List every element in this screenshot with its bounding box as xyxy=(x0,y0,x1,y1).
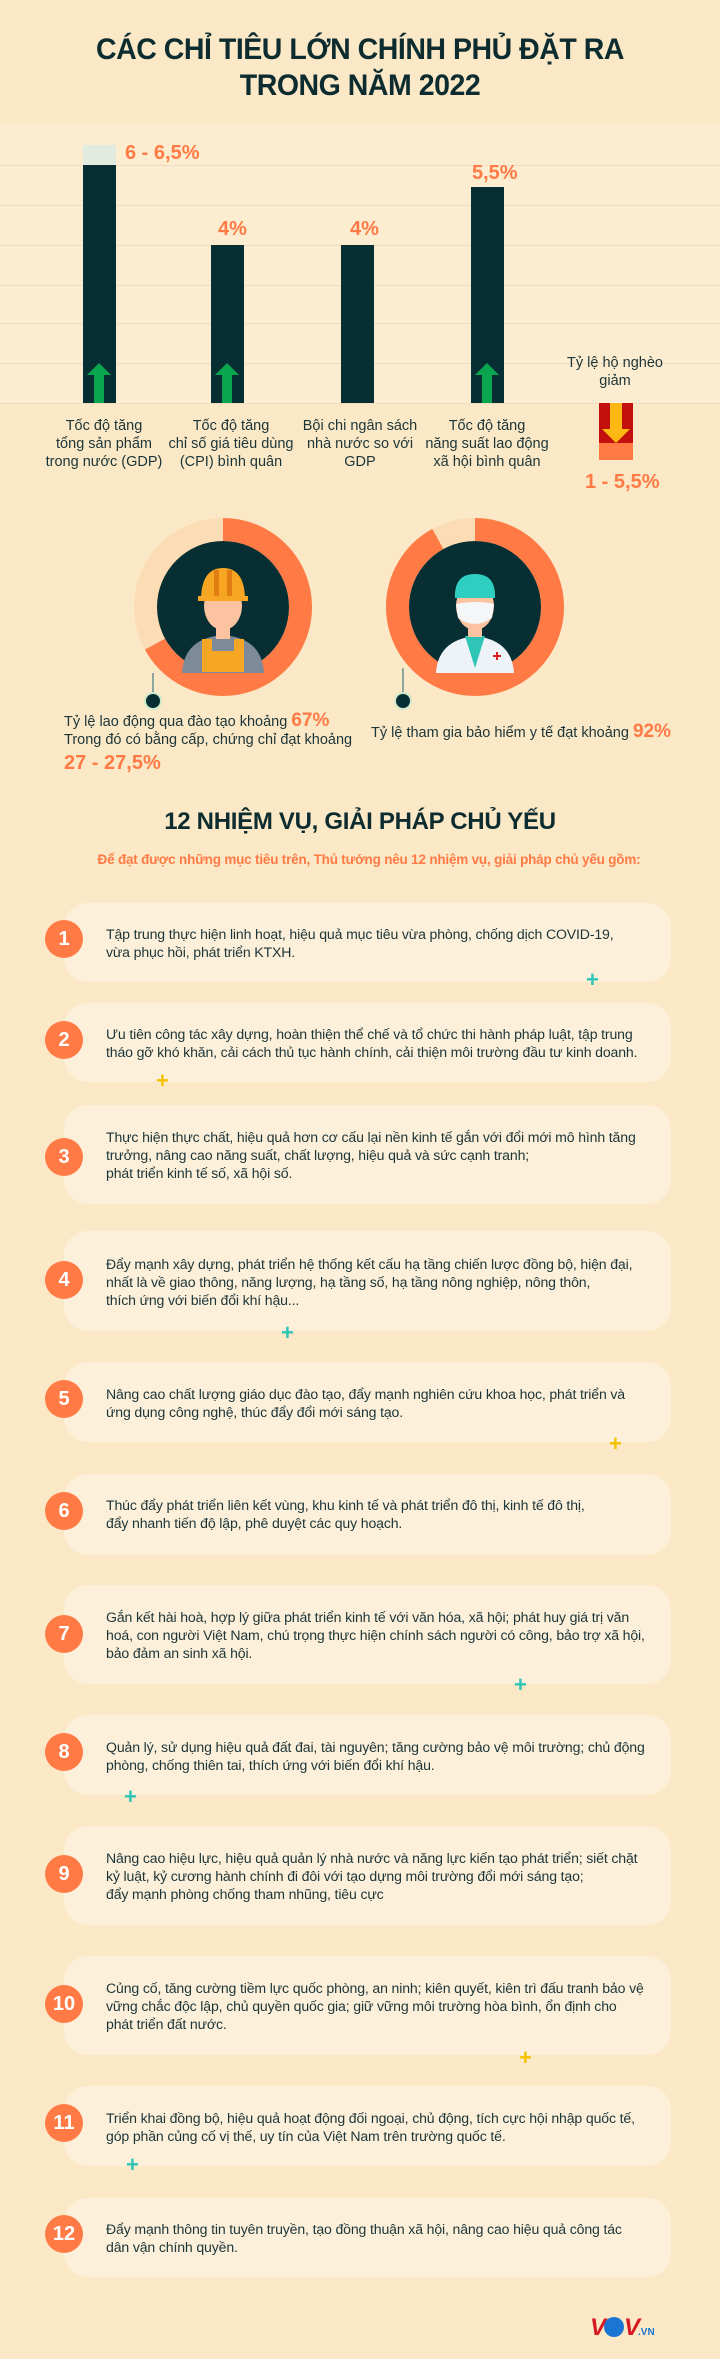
poverty indicator: 1 - 5,5% xyxy=(585,471,659,493)
task 7: hoá, con người Việt Nam, chú trọng thực hiện chính sách người có công, bảo trợ xã hội, xyxy=(106,1627,645,1643)
task 9: đẩy mạnh phòng chống tham nhũng, tiêu cực xyxy=(106,1886,384,1902)
task 2: tháo gỡ khó khăn, cải cách thủ tục hành chính, cải thiện môi trường đầu tư kinh doanh. xyxy=(106,1044,637,1060)
task 4: thích ứng với biến đổi khí hậu... xyxy=(106,1292,299,1308)
task 12: Đẩy mạnh thông tin tuyên truyền, tạo đồng thuận xã hội, nâng cao hiệu quả công tác xyxy=(106,2221,622,2237)
task 11: 11 xyxy=(53,2112,75,2134)
task 11: + xyxy=(126,2152,139,2177)
task 6: đẩy nhanh tiến độ lập, phê duyệt các quy hoạch. xyxy=(106,1515,402,1531)
task 5: ứng dụng công nghệ, thúc đẩy đổi mới sáng tạo. xyxy=(106,1404,403,1420)
bar labels: trong nước (GDP) xyxy=(46,454,162,470)
subtitle: Để đạt được những mục tiêu trên, Thủ tướng nêu 12 nhiệm vụ, giải pháp chủ yếu gồm: xyxy=(98,852,640,867)
task 3: trưởng, nâng cao năng suất, chất lượng, hiệu quả và sức cạnh tranh; xyxy=(106,1147,529,1163)
icon: worker xyxy=(182,568,264,673)
bar labels: nhà nước so với xyxy=(307,436,413,452)
poverty indicator: Tỷ lệ hộ nghèo xyxy=(567,355,663,371)
icon: down arrow box xyxy=(599,403,633,460)
task 2: + xyxy=(156,1068,169,1093)
task 10: 10 xyxy=(53,1993,75,2015)
task 1: Tập trung thực hiện linh hoạt, hiệu quả mục tiêu vừa phòng, chống dịch COVID-19, xyxy=(106,926,614,942)
bar: GDP xyxy=(83,145,116,403)
task 9: kỷ luật, kỷ cương hành chính đi đôi với tạo dựng môi trường đổi mới sáng tạo; xyxy=(106,1868,584,1884)
task 8: 8 xyxy=(58,1741,70,1763)
task 2 xyxy=(45,1003,671,1093)
task 3: 3 xyxy=(58,1146,70,1168)
task 4: nhất là về giao thông, năng lượng, hạ tầng số, hạ tầng nông nghiệp, nông thôn, xyxy=(106,1274,590,1290)
task 7: + xyxy=(514,1672,527,1697)
bar labels: Bội chi ngân sách xyxy=(303,418,417,434)
bar labels: GDP xyxy=(344,454,376,470)
task 10 xyxy=(45,1956,671,2070)
task 1: 1 xyxy=(58,928,70,950)
task 5: 5 xyxy=(58,1388,70,1410)
text: trained labor xyxy=(64,710,352,774)
task 8: phòng, chống thiên tai, thích ứng với biến đổi khí hậu. xyxy=(106,1757,435,1773)
task 1: + xyxy=(586,967,599,992)
bar labels: Tốc độ tăng xyxy=(66,418,142,434)
task 11: Triển khai đồng bộ, hiệu quả hoạt động đối ngoại, chủ động, tích cực hội nhập quốc tế, xyxy=(106,2110,635,2126)
task 11 xyxy=(45,2086,671,2177)
task 4: 4 xyxy=(58,1269,70,1291)
task 8: + xyxy=(124,1784,137,1809)
bar labels: (CPI) bình quân xyxy=(180,454,282,470)
icon: doctor xyxy=(436,574,514,673)
bar chart xyxy=(83,142,518,403)
bar labels xyxy=(46,418,549,470)
bar: labor productivity xyxy=(471,187,504,403)
task 4: + xyxy=(281,1320,294,1345)
task 5 xyxy=(45,1362,671,1456)
task 3: Thực hiện thực chất, hiệu quả hơn cơ cấu lại nền kinh tế gắn với đổi mới mô hình tăng xyxy=(106,1129,636,1145)
task 10: phát triển đất nước. xyxy=(106,2016,227,2032)
task 7: bảo đảm an sinh xã hội. xyxy=(106,1645,252,1661)
text: trained labor: Tỷ lệ lao động qua đào tạo khoảng 67% xyxy=(64,710,329,731)
title: TRONG NĂM 2022 xyxy=(240,69,480,102)
task 12: dân vận chính quyền. xyxy=(106,2239,238,2255)
task 1 xyxy=(45,903,671,992)
text: trained labor: 27 - 27,5% xyxy=(64,752,161,774)
task 10: + xyxy=(519,2045,532,2070)
task 6: 6 xyxy=(58,1500,70,1522)
task 7: Gắn kết hài hoà, hợp lý giữa phát triển kinh tế với văn hóa, xã hội; phát huy giá trị văn xyxy=(106,1609,629,1625)
task 6 xyxy=(45,1474,671,1555)
bar labels: chỉ số giá tiêu dùng xyxy=(169,436,293,452)
task 11: góp phần củng cố vị thế, uy tín của Việt Nam trên trường quốc tế. xyxy=(106,2128,506,2144)
bar labels: tổng sản phẩm xyxy=(56,436,152,452)
poverty indicator: giảm xyxy=(599,373,631,389)
task 3: phát triển kinh tế số, xã hội số. xyxy=(106,1165,292,1181)
logo: VOV: V V.VN xyxy=(590,2314,655,2341)
value: labor productivity: 5,5% xyxy=(472,162,518,184)
poverty indicator xyxy=(567,355,663,493)
leader line and dot xyxy=(402,668,404,698)
task 9 xyxy=(45,1826,671,1925)
bar labels: Tốc độ tăng xyxy=(449,418,525,434)
title xyxy=(96,32,624,102)
task 2: Ưu tiên công tác xây dựng, hoàn thiện thể chế và tổ chức thi hành pháp luật, tập trung xyxy=(106,1026,633,1042)
bar labels: Tốc độ tăng xyxy=(193,418,269,434)
task 8 xyxy=(45,1715,671,1809)
task 9: 9 xyxy=(58,1863,70,1885)
text: trained labor: Trong đó có bằng cấp, chứng chỉ đạt khoảng xyxy=(64,732,352,748)
leader line and dot xyxy=(152,673,154,701)
text: health insurance: Tỷ lệ tham gia bảo hiểm y tế đạt khoảng 92% xyxy=(371,721,671,742)
donut: trained labor 67% xyxy=(134,518,312,710)
title: CÁC CHỈ TIÊU LỚN CHÍNH PHỦ ĐẶT RA xyxy=(96,33,624,66)
bar labels: xã hội bình quân xyxy=(433,454,541,470)
task 8: Quản lý, sử dụng hiệu quả đất đai, tài nguyên; tăng cường bảo vệ môi trường; chủ động xyxy=(106,1739,645,1755)
task 10: vững chắc độc lập, chủ quyền quốc gia; giữ vững môi trường hòa bình, ổn định cho xyxy=(106,1998,617,2014)
bar labels: năng suất lao động xyxy=(425,436,549,452)
task 12 xyxy=(45,2198,671,2277)
task 2: 2 xyxy=(58,1029,70,1051)
value: budget deficit: 4% xyxy=(350,218,379,240)
icon: up arrows xyxy=(87,363,499,403)
chart background band xyxy=(0,125,720,403)
bar: budget deficit xyxy=(341,245,374,403)
task 12: 12 xyxy=(53,2223,75,2245)
value: GDP: 6 - 6,5% xyxy=(125,142,199,164)
value: CPI: 4% xyxy=(218,218,247,240)
task 9: Nâng cao hiệu lực, hiệu quả quản lý nhà nước và năng lực kiến tạo phát triển; siết chặt xyxy=(106,1850,637,1866)
task 7: 7 xyxy=(58,1623,70,1645)
task 5: + xyxy=(609,1431,622,1456)
task 5: Nâng cao chất lượng giáo dục đào tạo, đẩy mạnh nghiên cứu khoa học, phát triển và xyxy=(106,1386,625,1402)
task 10: Củng cố, tăng cường tiềm lực quốc phòng, an ninh; kiên quyết, kiên trì đấu tranh bảo vệ xyxy=(106,1980,644,1996)
task 3 xyxy=(45,1105,671,1204)
task 7 xyxy=(45,1585,671,1697)
task 4 xyxy=(45,1231,671,1345)
task 4: Đẩy mạnh xây dựng, phát triển hệ thống kết cấu hạ tầng chiến lược đồng bộ, hiện đại, xyxy=(106,1256,632,1272)
task 1: vừa phục hồi, phát triển KTXH. xyxy=(106,944,295,960)
bar: CPI xyxy=(211,245,244,403)
heading: 12 tasks: 12 NHIỆM VỤ, GIẢI PHÁP CHỦ YẾU xyxy=(164,808,556,835)
task 6: Thúc đẩy phát triển liên kết vùng, khu kinh tế và phát triển đô thị, kinh tế đô thị, xyxy=(106,1497,585,1513)
donut: health insurance 92% xyxy=(386,518,564,710)
